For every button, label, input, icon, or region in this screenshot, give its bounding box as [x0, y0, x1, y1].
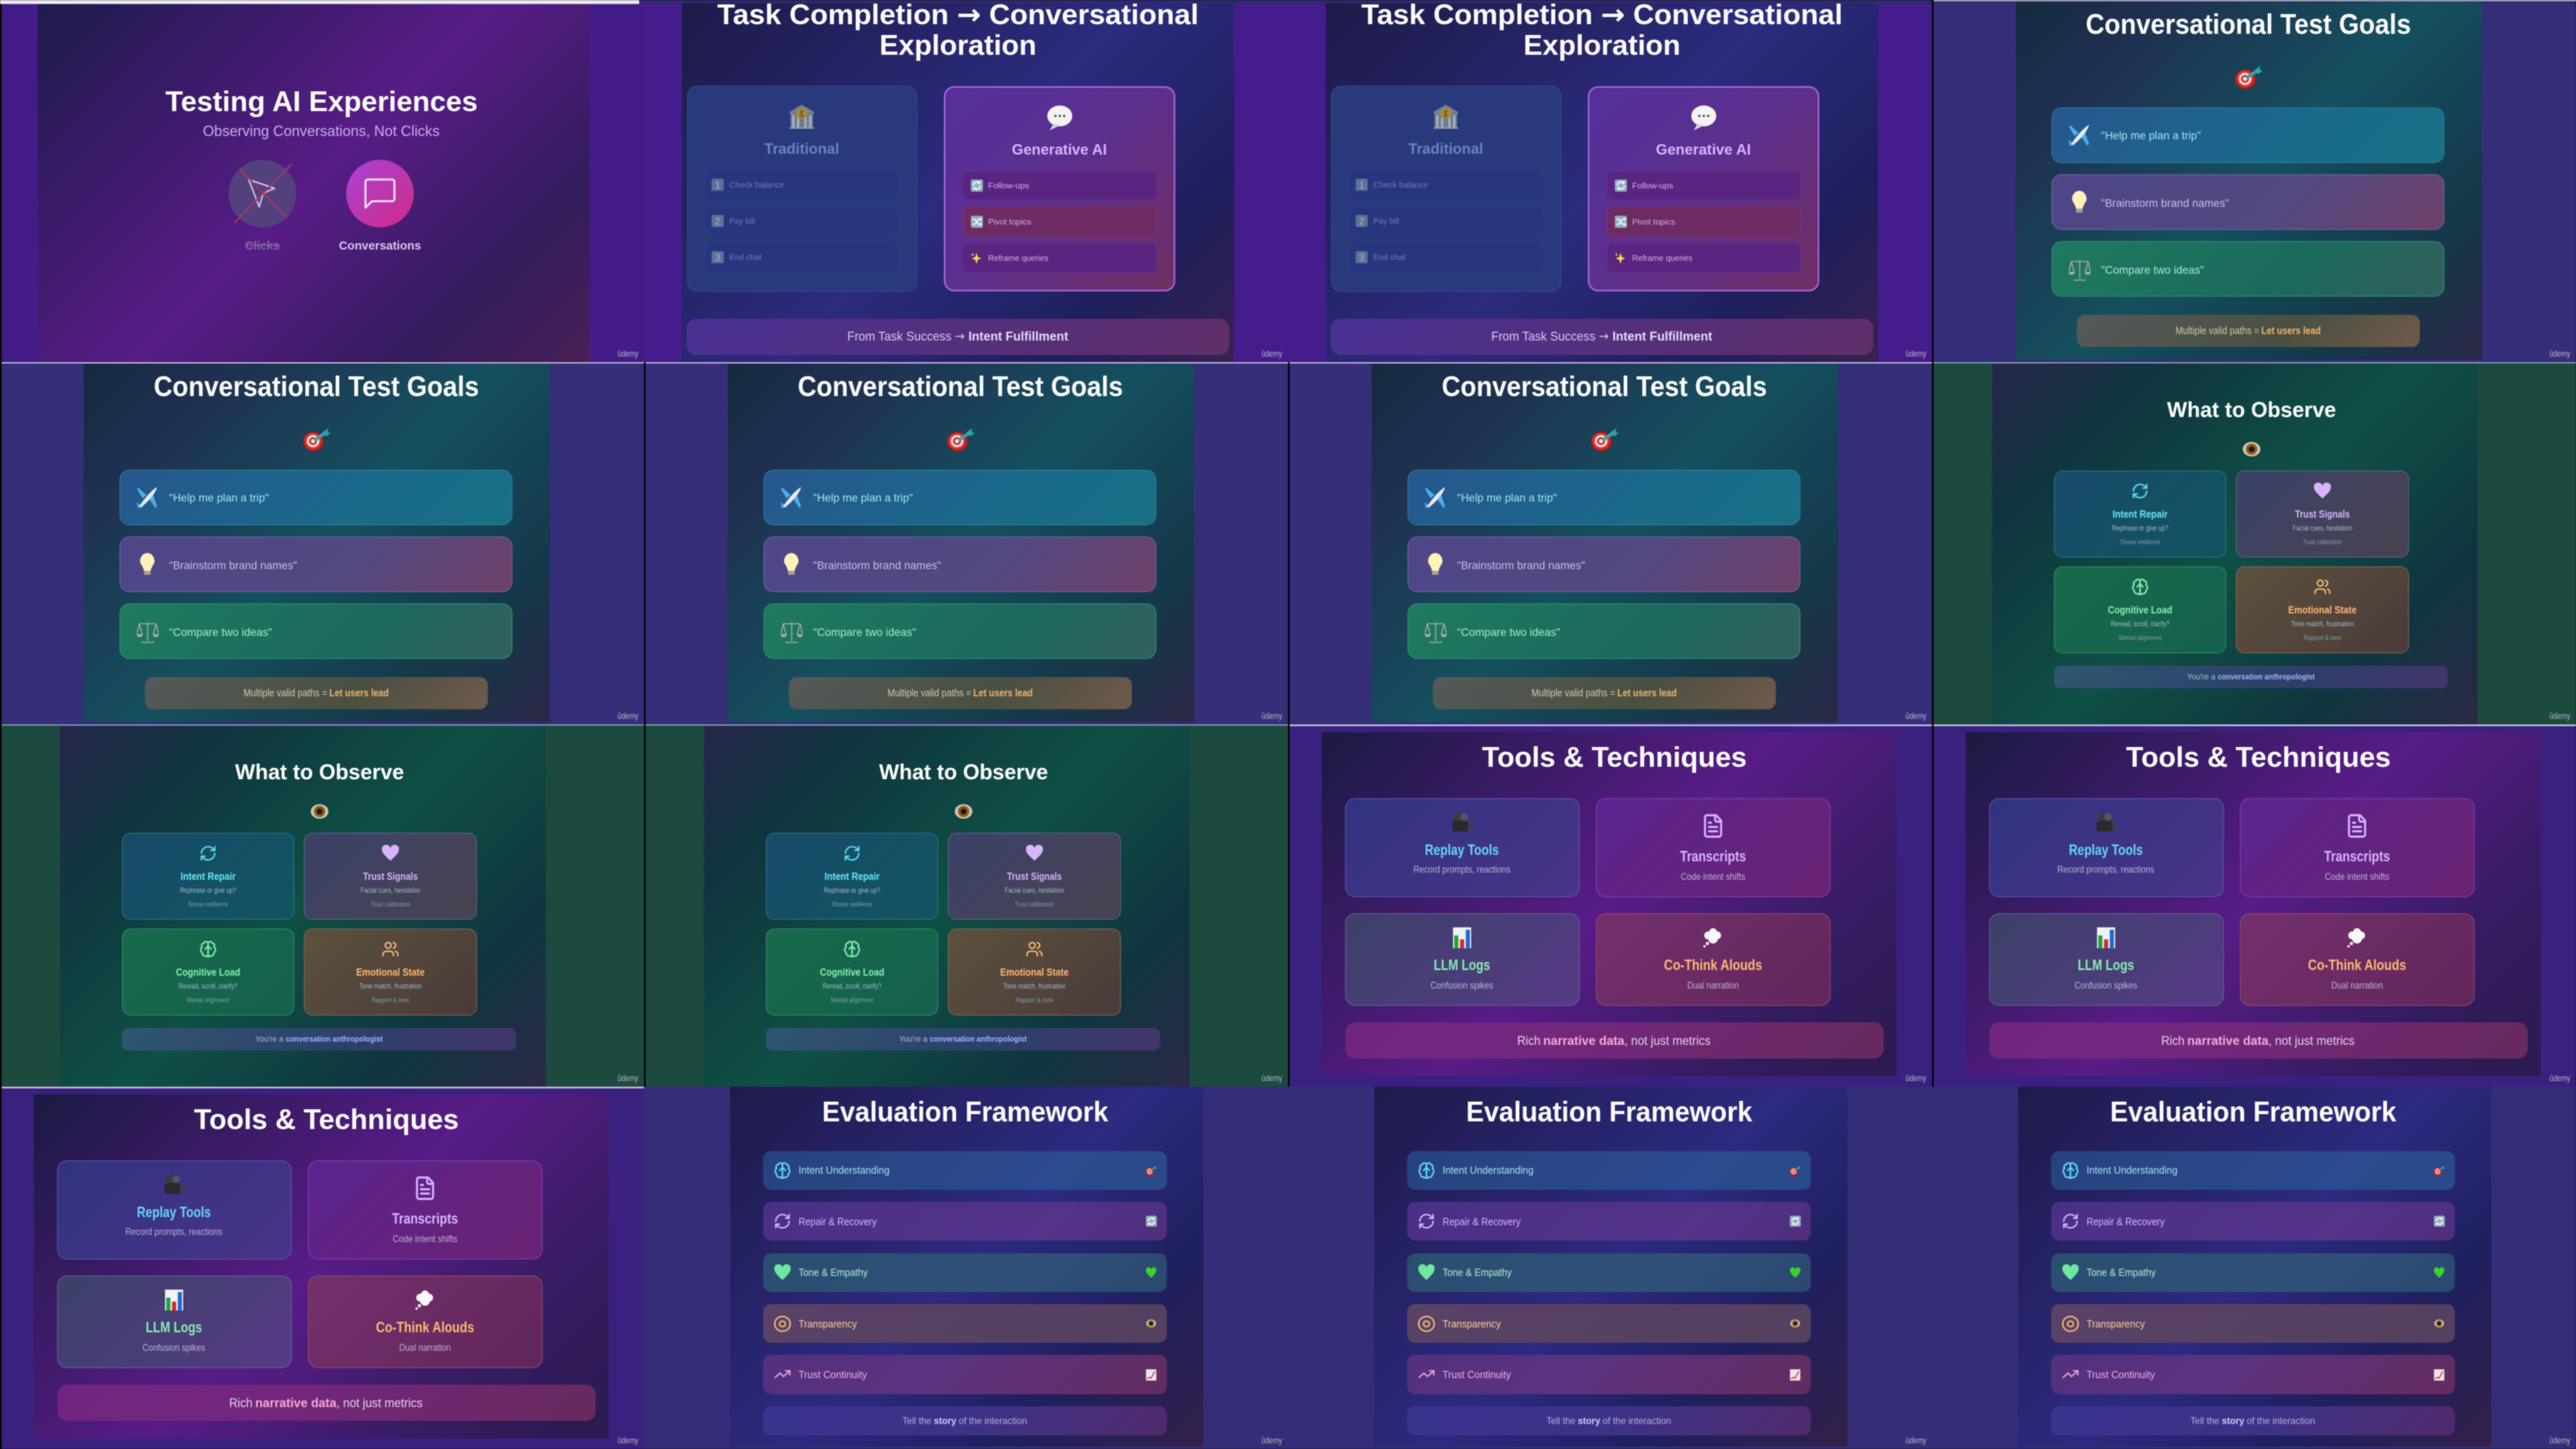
card: Replay Tools: Replay Tools — [137, 1204, 211, 1220]
logo: ûdemy — [617, 349, 638, 359]
takeaway bar: Tell the — [2190, 1415, 2219, 1426]
takeaway bar: Rich — [229, 1397, 253, 1410]
card: Cognitive Load: Cognitive Load — [2107, 604, 2173, 616]
card: Replay Tools: Replay Tools — [2069, 842, 2143, 858]
icon: chat bubble — [346, 159, 414, 227]
card: plan a trip: "Help me plan a trip" — [2101, 129, 2201, 142]
card: plan a trip: "Help me plan a trip" — [813, 491, 913, 504]
card: Trust Signals — [304, 833, 477, 919]
step 3: End chat — [729, 253, 762, 262]
step 2: 2 — [715, 216, 720, 227]
row: Tone & Empathy — [1407, 1253, 1811, 1292]
panel: Generative AI — [945, 87, 1174, 291]
row: Repair & Recovery — [763, 1202, 1167, 1241]
card: compare — [120, 604, 512, 658]
card: Co-Think Alouds: Co-Think Alouds — [1664, 957, 1762, 973]
step 1 — [1349, 170, 1543, 200]
heading: Traditional: Traditional — [765, 141, 839, 157]
card: Co-Think Alouds: Co-Think Alouds — [2308, 957, 2406, 973]
step 3 — [705, 243, 899, 272]
card: Intent Repair: Shows resilience — [2120, 538, 2161, 546]
logo: ûdemy — [1905, 1074, 1926, 1084]
card: Replay Tools — [58, 1161, 291, 1259]
card: Intent Repair: Rephrase or give up? — [824, 886, 881, 895]
card: Trust Signals: Facial cues, hesitation — [361, 886, 420, 895]
card: Emotional State — [2236, 567, 2409, 653]
card: Trust Signals: Trust Signals — [363, 870, 418, 882]
slide: Task Completion B — [1288, 0, 1932, 362]
card: LLM Logs — [58, 1276, 291, 1368]
card: Cognitive Load — [2054, 567, 2226, 653]
step 3: 3 — [715, 252, 720, 263]
takeaway bar: narrative data — [2187, 1034, 2268, 1048]
card: Trust Signals: Trust calibration — [2302, 538, 2343, 546]
card: Trust Signals — [948, 833, 1121, 919]
card: Transcripts: Code intent shifts — [393, 1233, 457, 1245]
card: brainstorm: "Brainstorm brand names" — [813, 559, 941, 572]
card: Cognitive Load: Mental alignment — [2119, 634, 2162, 642]
slide: Evaluation Framework A — [644, 1087, 1288, 1449]
takeaway bar: of the interaction — [2247, 1415, 2315, 1426]
row: Intent Understanding — [1407, 1151, 1811, 1190]
row: Intent Understanding: Intent Understanding — [799, 1165, 890, 1176]
row: Transparency: Transparency — [799, 1319, 857, 1330]
card: plan a trip — [120, 470, 512, 525]
card: Trust Signals — [2236, 471, 2409, 557]
takeaway bar: narrative data — [1543, 1034, 1624, 1048]
takeaway bar — [1407, 1406, 1811, 1435]
step 2: Pay bill — [729, 217, 755, 226]
takeaway bar: narrative data — [255, 1397, 336, 1410]
panel: Generative AI — [1589, 87, 1818, 291]
row: Trust Continuity: Trust Continuity — [2087, 1369, 2156, 1381]
takeaway bar: of the interaction — [959, 1415, 1027, 1426]
step 2 — [1349, 207, 1543, 236]
step 3 — [1349, 243, 1543, 272]
footer note: Let users lead — [2261, 325, 2321, 336]
label: Conversations: Conversations — [339, 239, 421, 253]
takeaway bar: , not just metrics — [1624, 1034, 1711, 1048]
row: Transparency: Transparency — [1443, 1319, 1501, 1330]
takeaway bar — [2051, 1406, 2455, 1435]
item: Reframe queries — [963, 243, 1157, 273]
card: LLM Logs: Confusion spikes — [2074, 980, 2137, 991]
title: Conversational Test Goals — [1442, 371, 1767, 402]
step 1: 1 — [715, 180, 720, 191]
takeaway bar: story — [934, 1415, 956, 1426]
title: What to Observe — [879, 760, 1048, 784]
footer note: Let users lead — [329, 687, 389, 699]
icon: speech bubble — [1047, 105, 1072, 130]
takeaway bar — [766, 1028, 1160, 1051]
card: Replay Tools — [1346, 799, 1579, 897]
card: brainstorm: "Brainstorm brand names" — [2101, 196, 2229, 209]
takeaway bar — [1331, 319, 1873, 355]
card: Trust Signals: Trust calibration — [1014, 900, 1055, 908]
footer note — [2077, 315, 2420, 347]
card: Co-Think Alouds: Dual narration — [399, 1342, 451, 1353]
footer note: Multiple valid paths = — [887, 687, 971, 699]
step 2: 2 — [1359, 216, 1364, 227]
card: Emotional State — [304, 929, 477, 1015]
card: LLM Logs: LLM Logs — [146, 1319, 202, 1335]
card: LLM Logs: Confusion spikes — [142, 1342, 205, 1353]
card: compare: "Compare two ideas" — [1457, 625, 1560, 638]
title: What to Observe — [2167, 398, 2336, 422]
card: brainstorm — [1408, 537, 1800, 592]
takeaway bar — [58, 1385, 596, 1421]
card: Cognitive Load: Cognitive Load — [175, 966, 241, 978]
logo: ûdemy — [1905, 349, 1926, 359]
title: Conversational Test Goals — [154, 371, 479, 402]
icon: bank — [790, 105, 814, 129]
icon: eye — [311, 804, 328, 819]
takeaway bar: Tell the — [1546, 1415, 1575, 1426]
card: plan a trip: "Help me plan a trip" — [1457, 491, 1557, 504]
takeaway bar: Rich — [2161, 1034, 2185, 1048]
card: Cognitive Load: Mental alignment — [187, 996, 230, 1004]
row: Tone & Empathy — [763, 1253, 1167, 1292]
logo: ûdemy — [2549, 1074, 2570, 1084]
card: brainstorm — [2052, 175, 2444, 229]
logo: ûdemy — [2549, 1436, 2570, 1446]
logo: ûdemy — [2549, 712, 2570, 721]
subtitle: Observing Conversations, Not Clicks — [203, 123, 440, 139]
card: plan a trip — [1408, 470, 1800, 525]
card: Transcripts: Code intent shifts — [1681, 871, 1745, 882]
slide: What to Observe A — [1934, 362, 2576, 724]
row: Trust Continuity: Trust Continuity — [1443, 1369, 1512, 1381]
footer note — [1433, 677, 1776, 709]
card: Cognitive Load: Reread, scroll, clarify? — [2111, 620, 2169, 629]
icon: eye — [955, 804, 972, 819]
footer note: Let users lead — [973, 687, 1033, 699]
icon: crossed-out cursor — [229, 159, 296, 227]
footer note: Multiple valid paths = — [243, 687, 327, 699]
card: Emotional State: Rapport & tone — [2304, 634, 2341, 642]
step 1: 1 — [1359, 180, 1364, 191]
card: brainstorm: "Brainstorm brand names" — [169, 559, 297, 572]
item: Reframe queries: Reframe queries — [989, 254, 1048, 263]
takeaway bar — [122, 1028, 516, 1051]
card: plan a trip — [764, 470, 1156, 525]
step 2 — [705, 207, 899, 236]
item: Follow-ups: Follow-ups — [1633, 181, 1673, 191]
takeaway bar: Intent Fulfillment — [1612, 330, 1713, 344]
card: compare: "Compare two ideas" — [2101, 263, 2204, 276]
icon: target — [2235, 66, 2263, 89]
logo: ûdemy — [1905, 1436, 1926, 1446]
card: Transcripts — [2240, 799, 2475, 897]
icon: speech bubble — [1691, 105, 1716, 130]
takeaway bar — [1346, 1022, 1884, 1059]
icon: bank — [1434, 105, 1458, 129]
takeaway bar: You're a — [255, 1034, 283, 1044]
logo: ûdemy — [2549, 349, 2570, 359]
slide: Evaluation Framework B — [1288, 1087, 1932, 1449]
step 2: Pay bill — [1373, 217, 1399, 226]
logo: ûdemy — [1261, 349, 1282, 359]
slide: Testing AI Experiences — [0, 0, 644, 362]
item: Follow-ups — [1607, 171, 1801, 200]
card: LLM Logs: LLM Logs — [1434, 957, 1490, 973]
takeaway bar: story — [2222, 1415, 2244, 1426]
title: Task Completion → Conversational — [1361, 0, 1843, 31]
card: LLM Logs — [1346, 914, 1579, 1005]
card: Co-Think Alouds: Dual narration — [2331, 980, 2383, 991]
takeaway bar: conversation anthropologist — [930, 1034, 1027, 1044]
card: Transcripts — [1596, 799, 1831, 897]
footer note: Multiple valid paths = — [1531, 687, 1615, 699]
row: Tone & Empathy: Tone & Empathy — [2087, 1267, 2157, 1278]
item: Pivot topics — [963, 207, 1157, 237]
title: Tools & Techniques — [1482, 742, 1747, 774]
slide: What to Observe B — [2, 724, 644, 1087]
card: plan a trip — [2052, 108, 2444, 163]
card: Emotional State: Tone match, frustration — [2291, 620, 2354, 629]
footer note: Multiple valid paths = — [2175, 325, 2259, 336]
card: Intent Repair: Shows resilience — [832, 900, 873, 908]
card: Intent Repair: Shows resilience — [188, 900, 229, 908]
card: Replay Tools: Record prompts, reactions — [2058, 864, 2154, 875]
row: Repair & Recovery — [1407, 1202, 1811, 1241]
card: Emotional State: Tone match, frustration — [1003, 982, 1066, 991]
takeaway bar: Intent Fulfillment — [968, 330, 1069, 344]
footer note — [145, 677, 488, 709]
slide: Tools & Techniques B — [1934, 724, 2576, 1087]
step 1: Check balance — [1373, 180, 1428, 190]
card: Emotional State: Rapport & tone — [1016, 996, 1053, 1004]
card: LLM Logs: LLM Logs — [2078, 957, 2134, 973]
slide: Conversational Test Goals C — [646, 362, 1288, 724]
logo: ûdemy — [617, 1074, 638, 1084]
title: Tools & Techniques — [2126, 742, 2391, 774]
card: brainstorm: "Brainstorm brand names" — [1457, 559, 1585, 572]
item: Pivot topics: Pivot topics — [989, 217, 1031, 227]
card: Transcripts: Transcripts — [1680, 848, 1746, 865]
step 1: Check balance — [729, 180, 784, 190]
title — [1361, 0, 1843, 61]
heading: Generative AI: Generative AI — [1656, 142, 1751, 158]
card: compare: "Compare two ideas" — [813, 625, 916, 638]
footer note — [789, 677, 1132, 709]
row: Repair & Recovery: Repair & Recovery — [2087, 1216, 2165, 1228]
row: Repair & Recovery — [2051, 1202, 2455, 1241]
logo: ûdemy — [617, 712, 638, 721]
title: Evaluation Framework — [1466, 1096, 1752, 1128]
title: Evaluation Framework — [2110, 1096, 2396, 1128]
card: Cognitive Load: Mental alignment — [831, 996, 874, 1004]
item: Follow-ups: Follow-ups — [989, 181, 1029, 191]
row: Tone & Empathy: Tone & Empathy — [799, 1267, 869, 1278]
item: Pivot topics: Pivot topics — [1633, 217, 1675, 227]
row: Transparency: Transparency — [2087, 1319, 2145, 1330]
card: Cognitive Load: Cognitive Load — [819, 966, 885, 978]
title: Conversational Test Goals — [2086, 9, 2411, 40]
item: Follow-ups — [963, 171, 1157, 200]
card: compare — [1408, 604, 1800, 658]
card: Replay Tools: Record prompts, reactions — [1414, 864, 1510, 875]
item: Pivot topics — [1607, 207, 1801, 237]
takeaway bar: , not just metrics — [2268, 1034, 2355, 1048]
card: Emotional State: Emotional State — [2288, 604, 2357, 616]
icon: target — [947, 428, 975, 451]
logo: ûdemy — [1905, 712, 1926, 721]
slide: What to Observe C — [646, 724, 1288, 1087]
card: Intent Repair: Rephrase or give up? — [180, 886, 237, 895]
footer note: Let users lead — [1617, 687, 1677, 699]
card: Cognitive Load: Reread, scroll, clarify? — [823, 982, 881, 991]
logo: ûdemy — [1261, 1074, 1282, 1084]
icon: eye — [2243, 442, 2260, 456]
card: Transcripts: Transcripts — [392, 1211, 458, 1227]
row: Trust Continuity — [2051, 1355, 2455, 1394]
takeaway bar: conversation anthropologist — [2218, 672, 2315, 682]
card: Trust Signals: Trust Signals — [1007, 870, 1062, 882]
row: Transparency — [1407, 1304, 1811, 1343]
title: Testing AI Experiences — [166, 86, 478, 118]
card: Emotional State: Emotional State — [356, 966, 425, 978]
takeaway bar: Rich — [1517, 1034, 1541, 1048]
row: Transparency — [763, 1304, 1167, 1343]
takeaway bar: Tell the — [902, 1415, 931, 1426]
takeaway bar — [2054, 666, 2448, 688]
card: Transcripts — [308, 1161, 543, 1259]
logo: ûdemy — [617, 1436, 638, 1446]
card: Intent Repair: Intent Repair — [2112, 508, 2168, 520]
row: Trust Continuity — [1407, 1355, 1811, 1394]
card: Intent Repair — [122, 833, 294, 919]
title: Tools & Techniques — [194, 1104, 459, 1136]
title: Exploration — [1523, 30, 1681, 61]
takeaway bar — [1990, 1022, 2528, 1059]
card: Cognitive Load — [122, 929, 294, 1015]
card: Co-Think Alouds: Dual narration — [1687, 980, 1739, 991]
logo: ûdemy — [1261, 712, 1282, 721]
card: Cognitive Load — [766, 929, 938, 1015]
row: Repair & Recovery: Repair & Recovery — [799, 1216, 877, 1228]
card: LLM Logs — [1990, 914, 2223, 1005]
heading: Traditional: Traditional — [1409, 141, 1483, 157]
card: LLM Logs: Confusion spikes — [1430, 980, 1493, 991]
icon: target — [303, 428, 331, 451]
slide: Task Completion A — [644, 0, 1288, 362]
card: Replay Tools: Replay Tools — [1425, 842, 1499, 858]
row: Tone & Empathy — [2051, 1253, 2455, 1292]
row: Intent Understanding — [763, 1151, 1167, 1190]
row: Intent Understanding — [2051, 1151, 2455, 1190]
card: Emotional State: Emotional State — [1000, 966, 1069, 978]
takeaway bar: , not just metrics — [336, 1397, 423, 1410]
card: Replay Tools: Record prompts, reactions — [126, 1226, 222, 1237]
takeaway bar: conversation anthropologist — [286, 1034, 383, 1044]
takeaway bar: You're a — [2187, 672, 2215, 682]
takeaway bar: story — [1578, 1415, 1600, 1426]
card: Intent Repair: Intent Repair — [824, 870, 880, 882]
slide: Tools & Techniques C — [2, 1087, 644, 1449]
card: Intent Repair: Rephrase or give up? — [2112, 524, 2169, 533]
row: Trust Continuity: Trust Continuity — [799, 1369, 868, 1381]
card: compare: "Compare two ideas" — [169, 625, 272, 638]
card: Intent Repair: Intent Repair — [180, 870, 236, 882]
card: Co-Think Alouds — [308, 1276, 543, 1368]
card: Trust Signals: Facial cues, hesitation — [2293, 524, 2352, 533]
slide: Conversational Test Goals D — [1290, 362, 1932, 724]
card: compare — [2052, 242, 2444, 296]
takeaway bar: From Task Success → — [847, 328, 964, 344]
title: What to Observe — [235, 760, 404, 784]
title: Conversational Test Goals — [798, 371, 1123, 402]
title: Exploration — [879, 30, 1037, 61]
heading: Generative AI: Generative AI — [1012, 142, 1107, 158]
item: Reframe queries — [1607, 243, 1801, 273]
card: brainstorm — [764, 537, 1156, 592]
card: compare — [764, 604, 1156, 658]
card: Cognitive Load: Reread, scroll, clarify? — [179, 982, 237, 991]
card: Replay Tools — [1990, 799, 2223, 897]
card: Co-Think Alouds — [1596, 914, 1831, 1005]
row: Tone & Empathy: Tone & Empathy — [1443, 1267, 1513, 1278]
title — [717, 0, 1199, 61]
logo: ûdemy — [1261, 1436, 1282, 1446]
card: Intent Repair — [2054, 471, 2226, 557]
row: Transparency — [2051, 1304, 2455, 1343]
step 1 — [705, 170, 899, 200]
panel: Traditional — [1331, 86, 1561, 291]
card: Transcripts: Transcripts — [2324, 848, 2390, 865]
row: Intent Understanding: Intent Understanding — [2087, 1165, 2178, 1176]
takeaway bar — [687, 319, 1229, 355]
slide: Tools & Techniques A — [1290, 724, 1932, 1087]
step 3: 3 — [1359, 252, 1364, 263]
item: Reframe queries: Reframe queries — [1633, 254, 1692, 263]
card: Emotional State: Rapport & tone — [372, 996, 409, 1004]
title: Task Completion → Conversational — [717, 0, 1199, 31]
card: Emotional State — [948, 929, 1121, 1015]
label: Clicks: Clicks — [245, 239, 280, 253]
step 3: End chat — [1373, 253, 1406, 262]
card: Intent Repair — [766, 833, 938, 919]
card: Trust Signals: Trust calibration — [370, 900, 411, 908]
takeaway bar: You're a — [899, 1034, 927, 1044]
card: brainstorm — [120, 537, 512, 592]
slide: Evaluation Framework C — [1932, 1087, 2576, 1449]
row: Intent Understanding: Intent Understanding — [1443, 1165, 1534, 1176]
title: Evaluation Framework — [822, 1096, 1108, 1128]
card: Trust Signals: Facial cues, hesitation — [1005, 886, 1064, 895]
card: plan a trip: "Help me plan a trip" — [169, 491, 269, 504]
row: Repair & Recovery: Repair & Recovery — [1443, 1216, 1521, 1228]
card: Emotional State: Tone match, frustration — [359, 982, 422, 991]
slide: Conversational Test Goals A — [1934, 0, 2576, 362]
takeaway bar: of the interaction — [1603, 1415, 1671, 1426]
card: Co-Think Alouds: Co-Think Alouds — [376, 1319, 474, 1335]
panel: Traditional — [687, 86, 917, 291]
row: Trust Continuity — [763, 1355, 1167, 1394]
takeaway bar — [763, 1406, 1167, 1435]
card: Co-Think Alouds — [2240, 914, 2475, 1005]
card: Transcripts: Code intent shifts — [2325, 871, 2389, 882]
takeaway bar: From Task Success → — [1491, 328, 1608, 344]
slide: Conversational Test Goals B — [2, 362, 644, 724]
card: Trust Signals: Trust Signals — [2295, 508, 2350, 520]
icon: target — [1591, 428, 1619, 451]
